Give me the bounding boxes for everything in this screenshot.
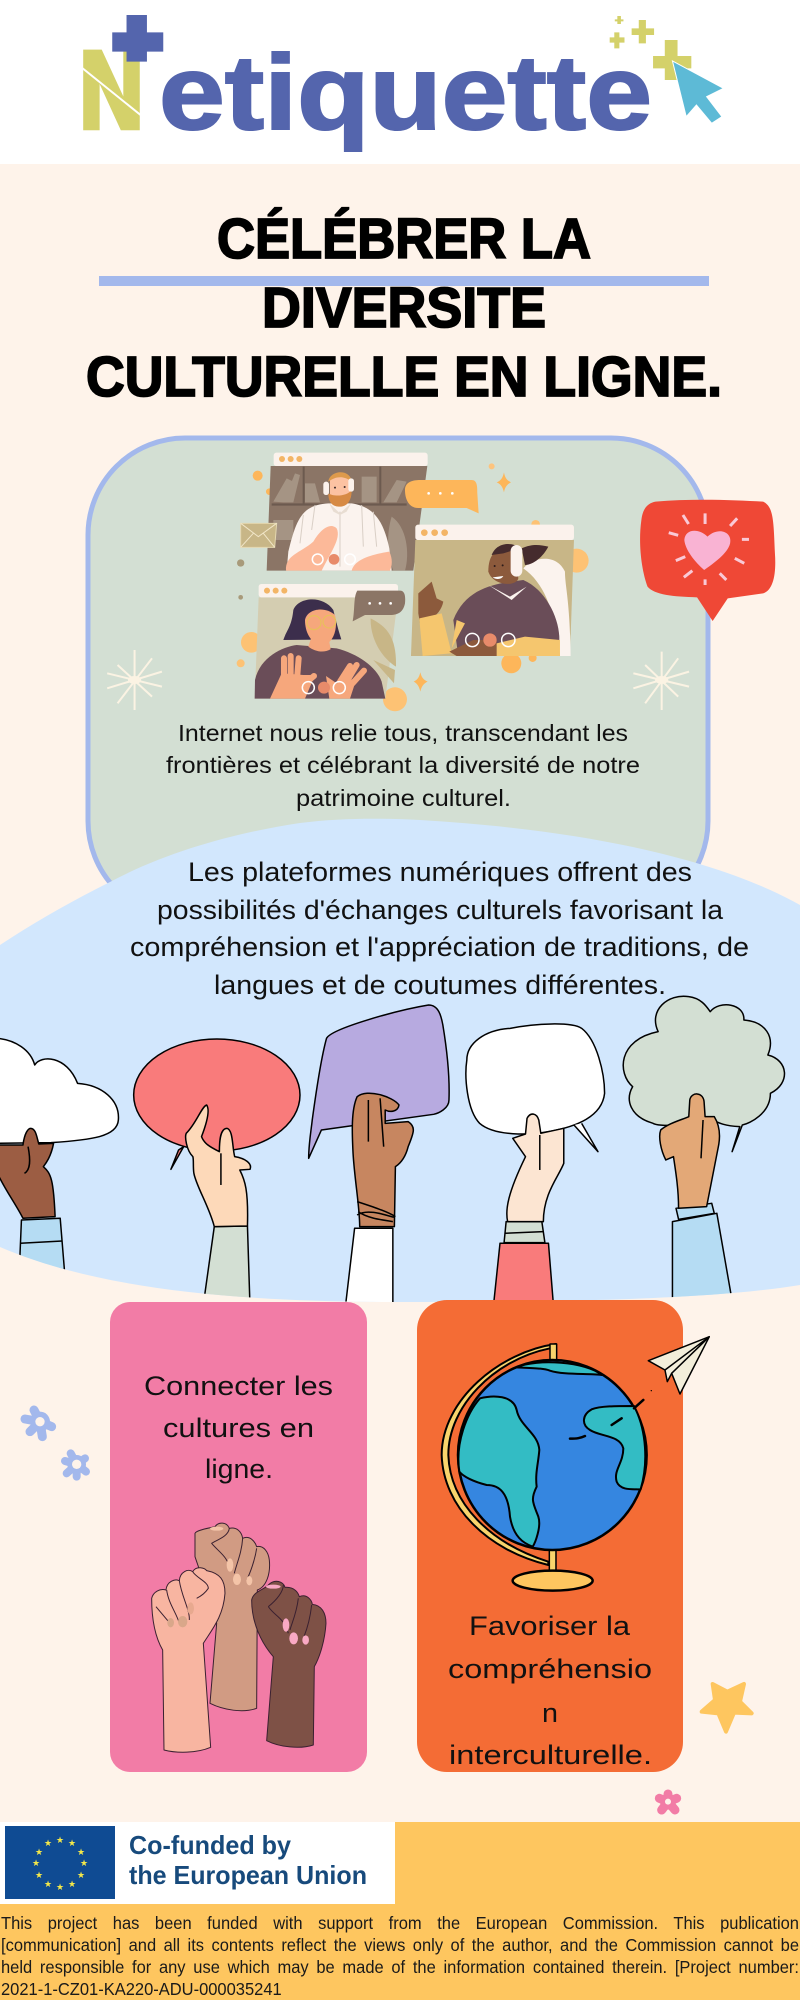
title: [86, 207, 722, 409]
panel text: frontières et célébrant la diversité de notre: [166, 752, 640, 778]
EU flag: ★: [35, 1848, 43, 1858]
orange card text: compréhensio: [448, 1654, 652, 1684]
icon: yellow star: [702, 1684, 752, 1732]
EU flag: ★: [44, 1880, 52, 1890]
envelope: [241, 523, 277, 547]
sparkles: [107, 650, 689, 710]
panel text: [166, 720, 640, 811]
panel: internet connects: [88, 438, 708, 918]
panel text: Internet nous relie tous, transcendant les: [178, 720, 628, 746]
EU text: Co-funded by: [129, 1830, 292, 1860]
icon: pink flower: [659, 1794, 677, 1810]
hand 2: red bubble: [134, 1039, 300, 1307]
disclaimer text: [1, 1914, 799, 1999]
disclaimer text: This project has been funded with support from the European Commission. This publication: [1, 1914, 799, 1933]
disclaimer text: [communication] and all its contents reflect the views only of the author, and the Commission cannot be: [1, 1936, 799, 1955]
panel: pink card: [110, 1302, 367, 1772]
disclaimer text: held responsible for any use which may be made of the information contained therein. [Project number:: [1, 1958, 799, 1977]
EU flag: ★: [56, 1836, 64, 1846]
EU flag: ★: [80, 1859, 88, 1869]
window 3: [255, 584, 398, 699]
pink card text: [144, 1371, 333, 1484]
EU flag: ★: [68, 1839, 76, 1849]
EU text: [129, 1830, 367, 1890]
EU flag: ★: [77, 1871, 85, 1881]
window 2: [411, 525, 574, 656]
title: DIVERSITE: [262, 276, 546, 340]
EU flag: ★: [56, 1883, 64, 1893]
EU flag: ★: [35, 1871, 43, 1881]
panel: blue hands section: [0, 819, 800, 1307]
logo wordmark: N: [80, 29, 143, 150]
blue section text: possibilités d'échanges culturels favorisant la: [157, 895, 724, 925]
brown chat bubble: [353, 591, 405, 621]
hand 5: green cloud: [623, 996, 784, 1307]
orange chat bubble: [405, 480, 479, 513]
logo plus signs and cursor: [112, 15, 723, 123]
EU logo block: [0, 1822, 395, 1904]
left fist: [152, 1568, 225, 1752]
EU flag: ★: [68, 1880, 76, 1890]
orange card text: Favoriser la: [469, 1611, 631, 1641]
disclaimer text: 2021-1-CZ01-KA220-ADU-000035241: [1, 1980, 282, 1999]
window 1: [267, 453, 428, 571]
icon: blue flowers: [25, 1410, 86, 1477]
illustration: video call windows: [237, 453, 589, 711]
pink card text: ligne.: [205, 1454, 273, 1484]
EU flag: ★: [44, 1839, 52, 1849]
hand 3: purple bubble: [309, 1005, 449, 1307]
orange card text: n: [542, 1698, 558, 1728]
blue section text: langues et de coutumes différentes.: [214, 970, 666, 1000]
logo header: [0, 0, 800, 164]
blue section text: [130, 857, 749, 1000]
title: CULTURELLE EN LIGNE.: [86, 345, 722, 409]
pink card text: Connecter les: [144, 1371, 333, 1401]
middle fist: [195, 1523, 270, 1711]
logo wordmark rest: etiquette: [159, 34, 652, 152]
EU text: the European Union: [129, 1860, 367, 1890]
right fist: [252, 1581, 326, 1747]
EU flag: [5, 1826, 115, 1899]
hand 4: white bubble: [466, 1024, 605, 1307]
blue section text: compréhension et l'appréciation de traditions, de: [130, 932, 749, 962]
orange card text: interculturelle.: [449, 1740, 652, 1770]
panel text: patrimoine culturel.: [296, 785, 511, 811]
title: CÉLÉBRER LA: [217, 207, 591, 271]
footer band: [0, 1822, 800, 2000]
illustration: globe: [442, 1344, 652, 1591]
icon: paper plane: [648, 1337, 709, 1394]
blue section text: Les plateformes numériques offrent des: [188, 857, 692, 887]
EU flag: ★: [32, 1859, 40, 1869]
orange card text: [448, 1611, 652, 1770]
illustration: raised fists: [152, 1523, 326, 1752]
hand 1: white cloud: [0, 1038, 118, 1293]
EU flag: ★: [77, 1848, 85, 1858]
illustration: hands holding speech bubbles: [0, 996, 784, 1307]
icon: heart speech bubble: [640, 500, 775, 621]
pink card text: cultures en: [163, 1413, 314, 1443]
panel: orange card: [417, 1300, 683, 1772]
